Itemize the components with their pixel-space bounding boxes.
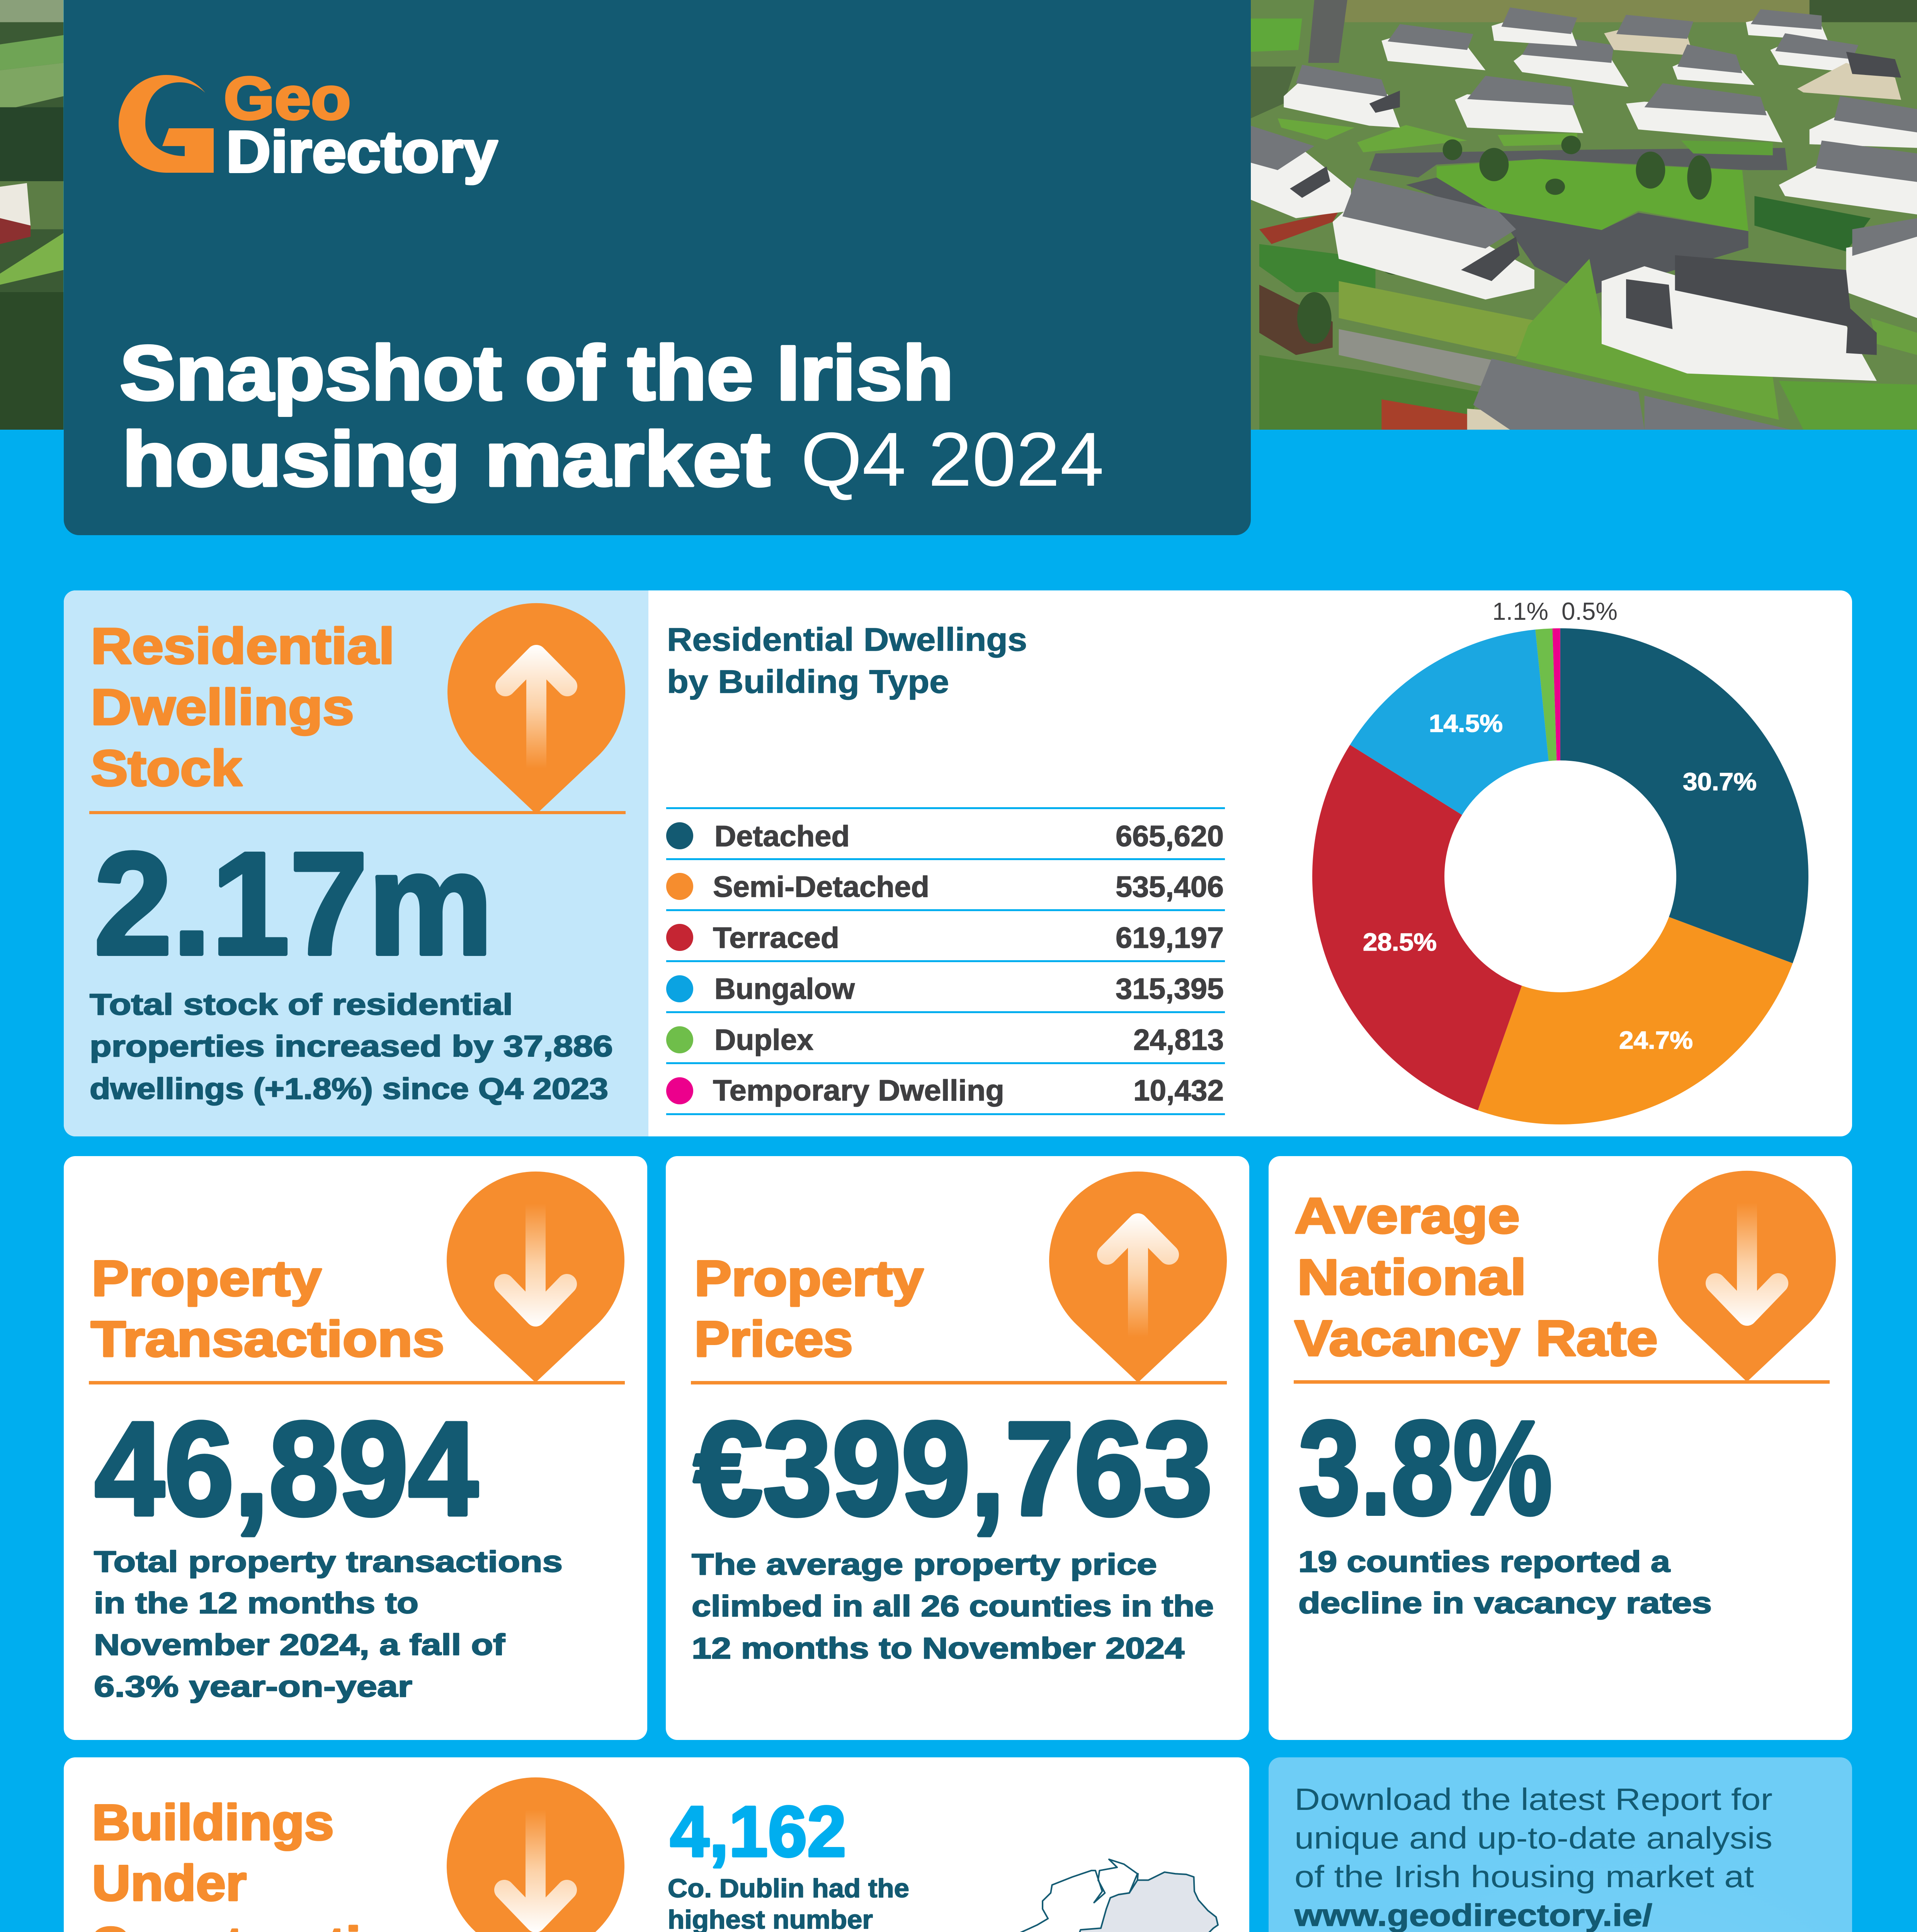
logo: GeoDirectory: Directory (226, 119, 498, 185)
chart: donut building types: 24.7% (1619, 1026, 1693, 1054)
callout: Dublin highest: 4,162 (670, 1792, 846, 1872)
header panel (64, 0, 1251, 535)
table: building types: 535,406 (1116, 871, 1224, 903)
title (120, 330, 1104, 502)
heading: property transactions (91, 1250, 444, 1367)
heading: average national vacancy rate: Average (1294, 1187, 1520, 1244)
table: building types: Duplex (714, 1024, 813, 1056)
table: building types: Terraced (713, 922, 839, 954)
table: building types: 24,813 (1133, 1024, 1224, 1056)
title: housing market (122, 416, 770, 502)
text: stock description: dwellings (+1.8%) since Q4 2023 (90, 1072, 608, 1105)
text: vacancy description (1298, 1545, 1712, 1620)
text: transactions description: November 2024, a fall of (94, 1628, 505, 1662)
table: building types: 665,620 (1116, 820, 1224, 853)
heading: residential dwellings stock: Dwellings (91, 679, 354, 735)
heading: average national vacancy rate (1294, 1187, 1658, 1366)
scene houses (1251, 7, 1917, 430)
panel: residential dwellings (64, 590, 1852, 1136)
panel: buildings under construction (64, 1757, 1249, 1932)
logo: GeoDirectory (119, 65, 498, 185)
heading: residential dwellings stock: Residential (91, 617, 395, 674)
table: building types: 10,432 (1133, 1074, 1224, 1107)
heading: property prices: Property (694, 1250, 924, 1306)
heading: property transactions: Transactions (91, 1311, 444, 1367)
text: download call to action: Download the latest Report for (1294, 1782, 1772, 1816)
text: download call to action: www.geodirectory.ie/ (1294, 1898, 1652, 1932)
heading: property prices (694, 1250, 924, 1367)
stat: 2.17m: 2.17m (94, 822, 493, 985)
heading: dwellings by building type (667, 621, 1027, 700)
icon: pin arrow down (447, 1172, 624, 1383)
table: building types: 619,197 (1116, 922, 1224, 954)
text: stock description (90, 988, 613, 1105)
logo: GeoDirectory: Geo (224, 65, 351, 132)
heading: dwellings by building type: Residential Dwellings (667, 621, 1027, 658)
text: stock description: Total stock of residential (90, 988, 513, 1021)
heading: buildings under construction: Buildings (92, 1794, 334, 1850)
region: Northern Ireland (1063, 1872, 1235, 1932)
text: prices description: 12 months to November 2024 (692, 1632, 1184, 1665)
icon: pin arrow up (447, 603, 625, 814)
text: download call to action: unique and up-to-date analysis (1294, 1821, 1772, 1855)
panel: property prices (666, 1156, 1249, 1740)
chart: donut building types: 28.5% (1363, 928, 1437, 956)
table: building types (666, 807, 1225, 1115)
icon: pin arrow up (1049, 1172, 1227, 1383)
scene trees (1297, 136, 1712, 344)
text: vacancy description: 19 counties reported a (1298, 1545, 1670, 1578)
heading: property prices: Prices (694, 1311, 853, 1367)
chart: donut building types: 30.7% (1683, 768, 1757, 796)
stat: 3.8%: 3.8% (1298, 1394, 1552, 1543)
panel: stock summary (64, 590, 648, 1136)
table: building types: Bungalow (714, 973, 855, 1005)
text: download call to action: of the Irish housing market at (1294, 1859, 1754, 1894)
chart: donut building types: 1.1% (1492, 597, 1548, 625)
panel: vacancy rate (1269, 1156, 1852, 1740)
heading: residential dwellings stock (91, 617, 395, 796)
callout: Dublin highest: Co. Dublin had the (668, 1874, 909, 1903)
stat: €399,763: €399,763 (694, 1395, 1213, 1543)
heading: average national vacancy rate: Vacancy Rate (1294, 1310, 1658, 1366)
heading: buildings under construction (90, 1794, 427, 1932)
table: building types: Semi-Detached (713, 871, 929, 903)
text: prices description: The average property price (692, 1548, 1157, 1581)
text: prices description (692, 1548, 1214, 1665)
coastline (904, 1859, 1204, 1932)
panel: property transactions (64, 1156, 647, 1740)
title: Snapshot of the Irish (120, 330, 954, 416)
text: stock description: properties increased by 37,886 (90, 1030, 613, 1063)
heading: dwellings by building type: by Building Type (667, 663, 949, 700)
heading: buildings under construction: Under (92, 1855, 247, 1911)
text: transactions description (94, 1545, 563, 1703)
text: prices description: climbed in all 26 counties in the (692, 1590, 1214, 1623)
table: building types: 315,395 (1116, 973, 1224, 1005)
panel: download report (1269, 1757, 1852, 1932)
chart: donut building types (1363, 597, 1757, 1058)
heading: property transactions: Property (92, 1250, 321, 1306)
title: Q4 2024 (801, 417, 1104, 502)
text: transactions description: Total property transactions (94, 1545, 563, 1578)
text: vacancy description: decline in vacancy rates (1298, 1587, 1712, 1620)
chart: donut building types: 0.5% (1561, 597, 1618, 625)
text: download call to action (1294, 1782, 1772, 1932)
heading: residential dwellings stock: Stock (91, 740, 242, 796)
map: Ireland counties (904, 1859, 1235, 1932)
callout: Dublin highest (668, 1792, 909, 1932)
table: building types: Temporary Dwelling (713, 1074, 1004, 1107)
icon: pin arrow down (1658, 1171, 1836, 1382)
photo: right housing estate (1251, 0, 1917, 430)
heading: average national vacancy rate: National (1297, 1249, 1526, 1305)
photo: left housing strip (0, 0, 64, 430)
text: transactions description: in the 12 months to (94, 1587, 418, 1620)
icon: pin arrow down (447, 1777, 624, 1932)
chart: donut building types: 14.5% (1429, 709, 1503, 737)
text: transactions description: 6.3% year-on-year (94, 1670, 412, 1703)
table: building types: Detached (714, 820, 850, 853)
stat: 46,894: 46,894 (95, 1395, 479, 1543)
